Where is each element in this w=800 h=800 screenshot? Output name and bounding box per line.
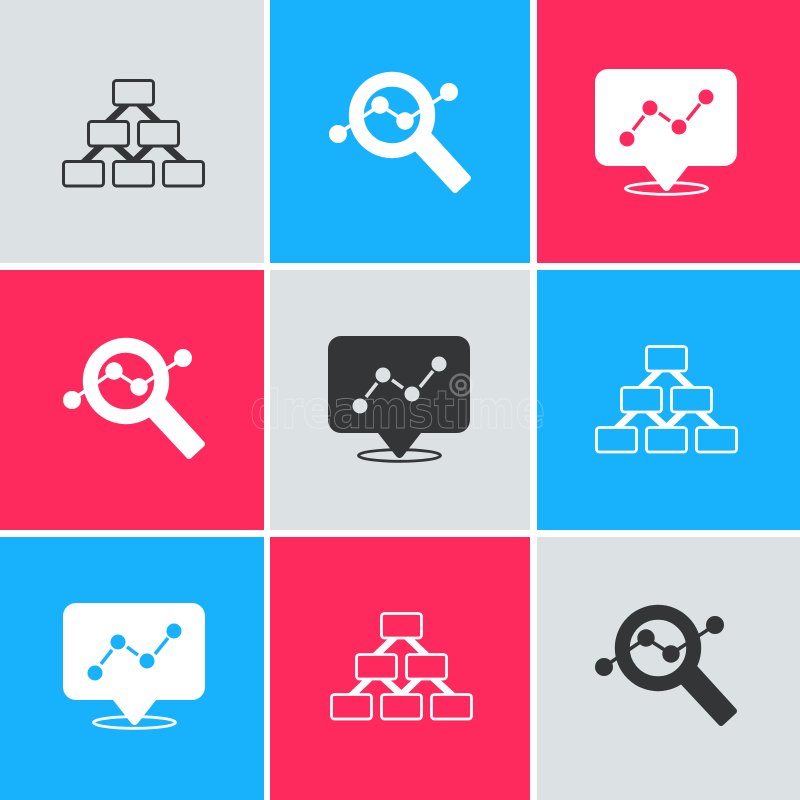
- icon: white magnifier with line chart: [329, 79, 468, 190]
- panel: location chart on red: [537, 0, 800, 263]
- panel: hierarchy on blue: [537, 270, 800, 530]
- watermark: dreamstime: [250, 380, 545, 441]
- icon: dark hierarchy diagram: [64, 80, 204, 186]
- icon: white chart pin: [595, 69, 737, 194]
- panel: magnifier on grey: [537, 537, 800, 800]
- panel: location chart on blue: [0, 537, 264, 800]
- icon: white hierarchy diagram: [596, 346, 736, 452]
- panel: magnifier on blue: [270, 0, 530, 263]
- icon: white magnifier with line chart: [63, 345, 202, 456]
- panel: hierarchy on grey: [0, 0, 264, 263]
- panel: location chart on grey: [270, 270, 530, 530]
- panel: magnifier on red: [0, 270, 264, 530]
- icon: dark magnifier with line chart: [595, 612, 734, 723]
- icon: dark chart pin: [328, 336, 470, 461]
- icon: white hierarchy diagram: [332, 614, 472, 719]
- icon: white chart pin: [63, 603, 205, 728]
- panel: hierarchy on red: [270, 537, 530, 800]
